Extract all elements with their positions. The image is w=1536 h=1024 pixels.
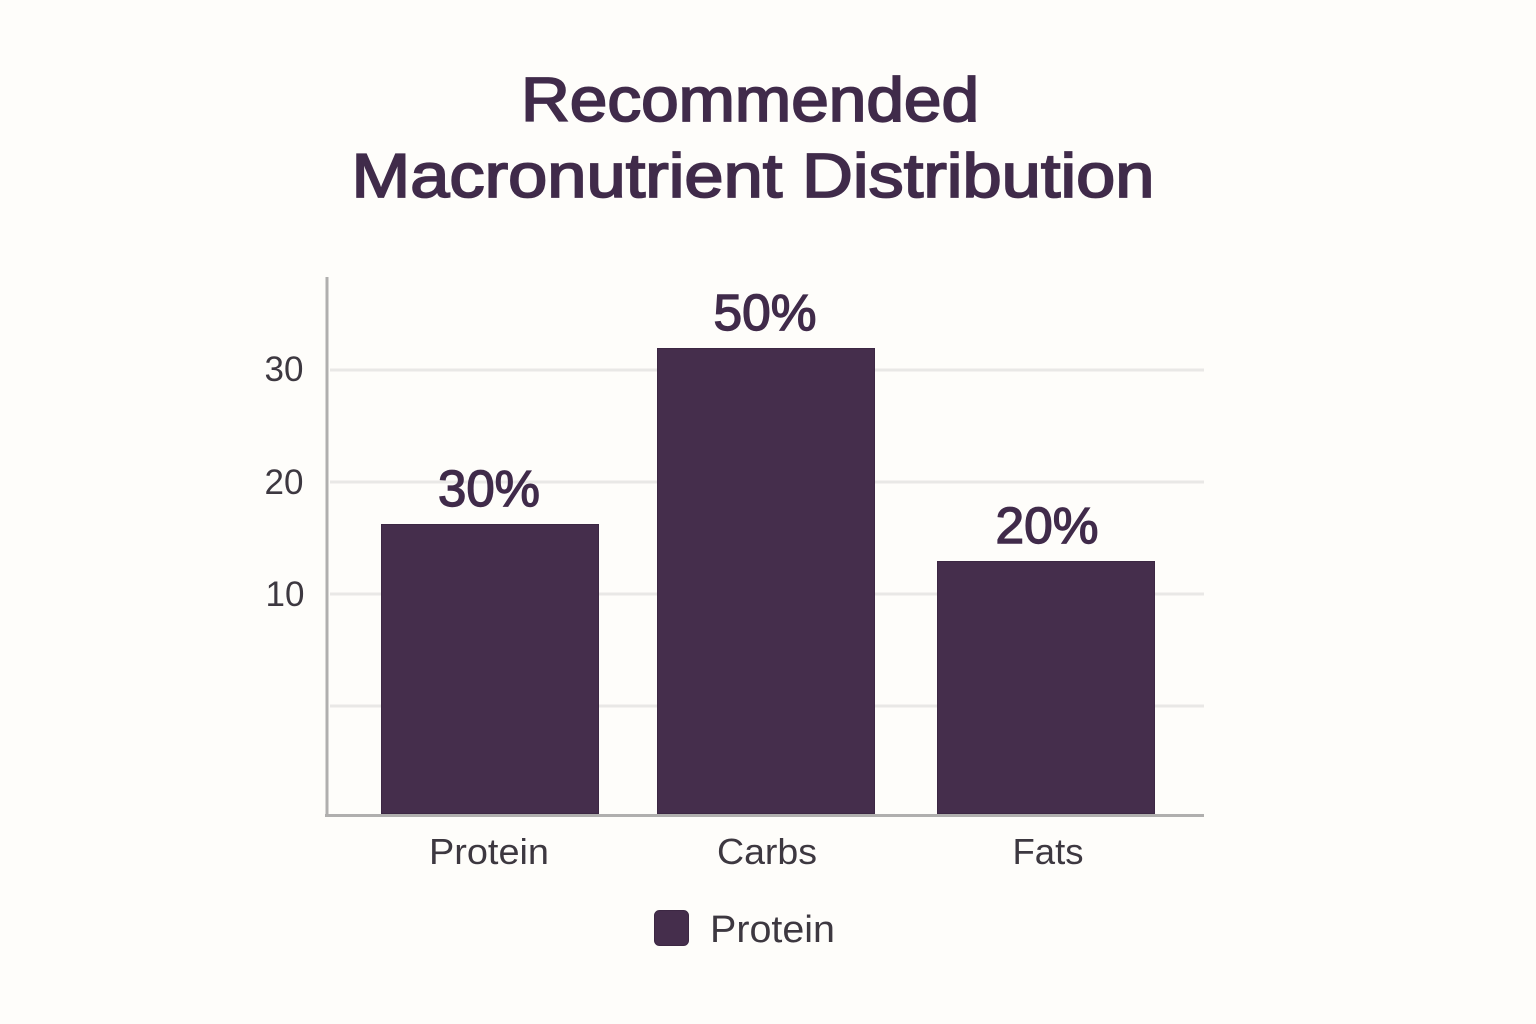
category labels: Carbs <box>717 831 817 872</box>
title: Recommended <box>521 66 979 135</box>
category labels: Protein <box>429 831 549 872</box>
legend label: Protein <box>710 909 835 951</box>
y axis labels: 20 <box>265 463 303 502</box>
title: Macronutrient Distribution <box>352 142 1154 211</box>
bar: fats <box>938 562 1154 814</box>
x axis <box>325 814 1204 817</box>
y axis labels: 10 <box>266 575 304 614</box>
bar chart <box>265 277 1204 872</box>
value label: protein: 30% <box>438 460 540 517</box>
legend swatch <box>654 910 688 946</box>
bar: protein <box>382 524 598 814</box>
category labels <box>429 831 1084 872</box>
y axis labels: 30 <box>265 350 303 389</box>
value label: carbs: 50% <box>714 284 816 341</box>
title <box>352 66 1154 211</box>
value label: fats: 20% <box>996 497 1098 554</box>
y axis labels <box>265 350 304 614</box>
bar: carbs <box>658 348 874 814</box>
legend <box>654 909 835 951</box>
y axis <box>326 277 328 817</box>
category labels: Fats <box>1012 831 1084 872</box>
